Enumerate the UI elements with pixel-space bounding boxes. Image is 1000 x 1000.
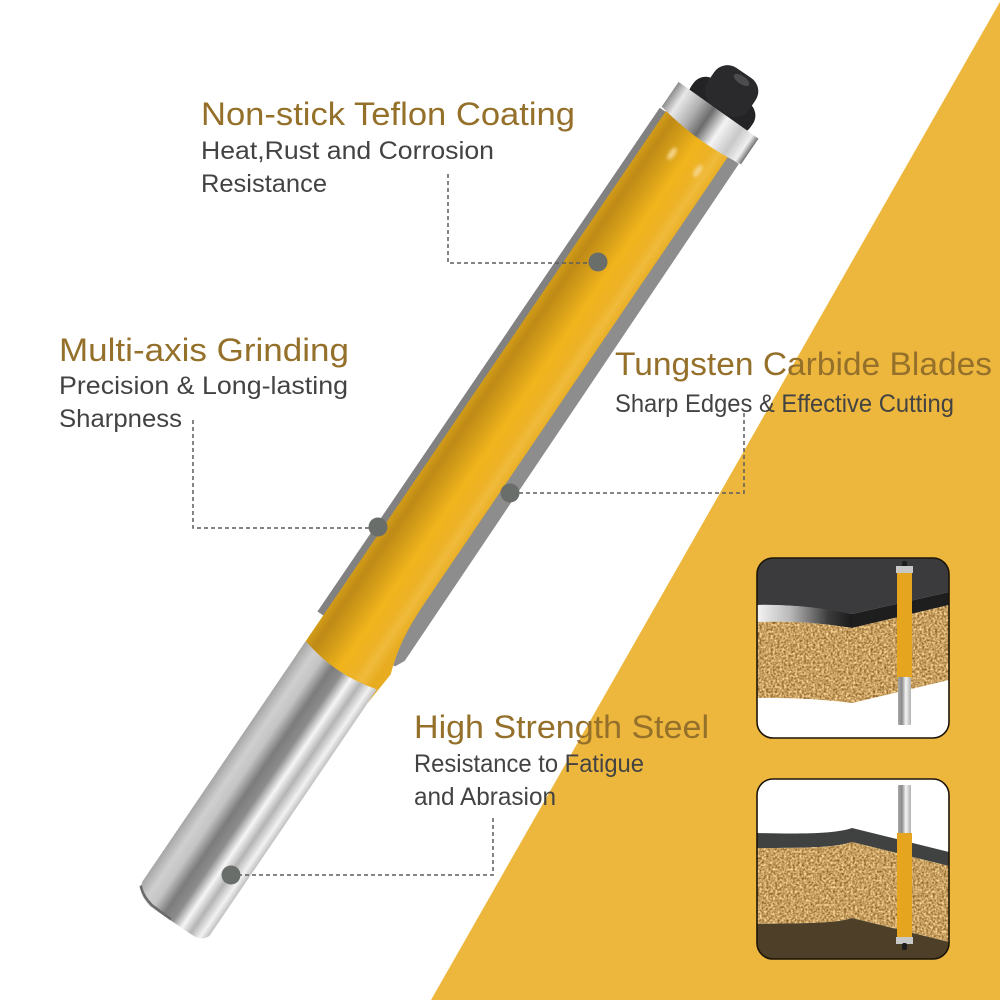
text: Non-stick Teflon Coating: Heat,Rust and Corrosion [201, 137, 494, 165]
text: High Strength Steel [414, 709, 709, 811]
black board side [852, 592, 949, 628]
body highlights [666, 146, 704, 179]
text: Multi-axis Grinding: Sharpness [59, 405, 182, 433]
text: High Strength Steel: and Abrasion [414, 783, 556, 811]
yellow coated body [297, 108, 741, 704]
yellow diagonal background [431, 0, 1000, 1000]
text: Multi-axis Grinding: Precision & Long-lasting [59, 372, 348, 400]
text: Multi-axis Grinding [59, 332, 349, 433]
callout lines and dots [193, 174, 744, 884]
small router bit [896, 785, 913, 950]
callout: grinding [193, 420, 388, 536]
steel shank [133, 641, 377, 943]
cork faces [757, 842, 949, 942]
black bearing nut [683, 53, 774, 140]
dark board top [757, 558, 949, 614]
bearing washer [658, 82, 760, 167]
router bit [127, 45, 785, 947]
text: Tungsten Carbide Blades [615, 346, 992, 418]
text: Non-stick Teflon Coating: Non-stick Teflon Coating [201, 96, 575, 132]
metal trimmed edge [757, 605, 852, 628]
callout: steel [222, 818, 493, 884]
panel: top edge routing [757, 558, 949, 738]
dark underside [757, 918, 949, 959]
text: Multi-axis Grinding: Multi-axis Grinding [59, 332, 349, 368]
text: High Strength Steel: High Strength Steel [414, 709, 709, 745]
text: Non-stick Teflon Coating: Resistance [201, 170, 327, 198]
small router bit [896, 561, 913, 725]
cork faces [757, 605, 949, 703]
text: Tungsten Carbide Blades: Sharp Edges & Effective Cutting [615, 390, 954, 418]
text: Tungsten Carbide Blades: Tungsten Carbide Blades [615, 346, 992, 382]
left carbide blade [317, 108, 670, 618]
dark board band [757, 828, 949, 866]
callout: blades [500, 413, 744, 502]
right carbide blade [379, 152, 741, 669]
panel: bottom edge routing [757, 779, 949, 959]
callout: coating [448, 174, 608, 272]
text: Non-stick Teflon Coating [201, 96, 575, 198]
shank chamfer [135, 886, 177, 919]
text: High Strength Steel: Resistance to Fatigue [414, 750, 644, 778]
